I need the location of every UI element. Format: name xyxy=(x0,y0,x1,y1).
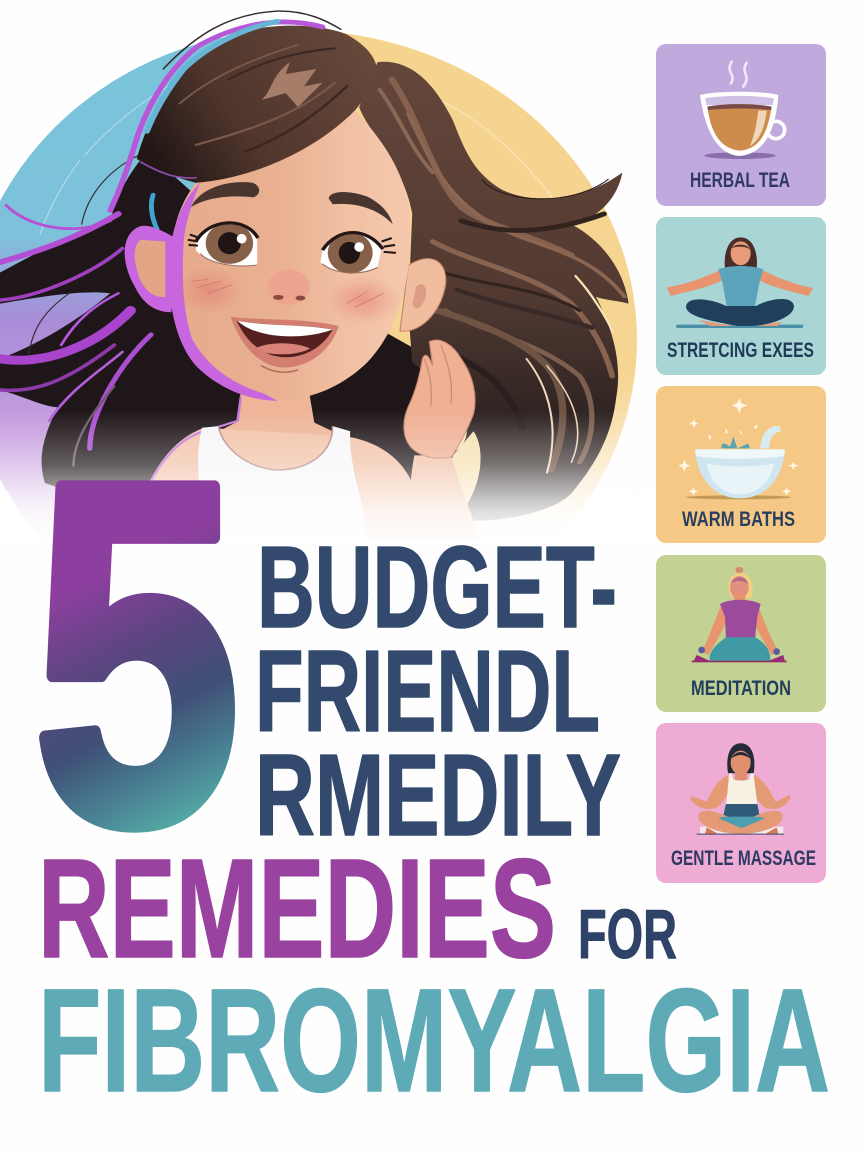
mouth xyxy=(231,317,339,372)
panel: gentle massage xyxy=(656,723,826,883)
left purple strands xyxy=(0,155,151,466)
title line: FRIENDL: FRIENDL xyxy=(255,626,600,756)
white fade at bottom of hero xyxy=(0,410,660,664)
panel: meditation xyxy=(656,555,826,712)
title line: BUDGET-: BUDGET- xyxy=(257,522,617,652)
hero illustration: girl with flowing hair xyxy=(0,11,660,664)
back hair right xyxy=(359,62,629,521)
right hair strands xyxy=(392,79,624,473)
label: herbal tea: HERBAL TEA xyxy=(690,169,790,192)
hair streaks xyxy=(141,45,433,178)
icon: meditating woman xyxy=(692,567,787,662)
nose xyxy=(267,269,310,305)
label: warm baths: WARM BATHS xyxy=(682,508,795,531)
hero circle backdrop xyxy=(0,30,637,650)
top hair xyxy=(137,26,378,183)
right eyebrow xyxy=(329,192,393,224)
title line: REMEDIES: REMEDIES xyxy=(38,829,556,987)
yellow gap beside arm xyxy=(452,431,481,507)
purple shoulder rim xyxy=(151,397,241,481)
right eye xyxy=(320,232,396,274)
label: gentle massage: GENTLE MASSAGE xyxy=(671,847,816,870)
panel: stretching exercises xyxy=(656,217,826,375)
title: big number 5: 5 xyxy=(33,382,240,924)
right ear xyxy=(400,259,446,331)
shoulders xyxy=(139,428,412,538)
neck xyxy=(204,386,351,483)
icon: seated woman xyxy=(691,743,790,835)
label: meditation: MEDITATION xyxy=(691,677,791,700)
icon: seated stretching woman xyxy=(667,237,813,328)
back hair left xyxy=(0,152,469,518)
left eyebrow xyxy=(191,182,259,207)
icon: bowl with sparkles xyxy=(678,398,798,499)
title word: FOR: FOR xyxy=(578,895,677,973)
panel: herbal tea xyxy=(656,44,826,206)
raised hand and arm xyxy=(404,340,482,542)
left ear xyxy=(125,226,176,312)
purple and blue hair rim xyxy=(110,11,341,229)
hair highlight xyxy=(261,62,322,107)
white tank top xyxy=(198,426,367,542)
panel: warm baths xyxy=(656,386,826,543)
left eye xyxy=(188,223,258,266)
girl figure xyxy=(0,11,629,542)
icon: tea cup xyxy=(700,62,785,159)
title line: RMEDILY: RMEDILY xyxy=(255,730,621,860)
face xyxy=(171,110,410,400)
purple face rim xyxy=(169,183,278,401)
neckline trim xyxy=(218,426,333,470)
label: stretching exercises: STRETCING EXEES xyxy=(667,339,814,362)
cheeks xyxy=(173,266,400,325)
